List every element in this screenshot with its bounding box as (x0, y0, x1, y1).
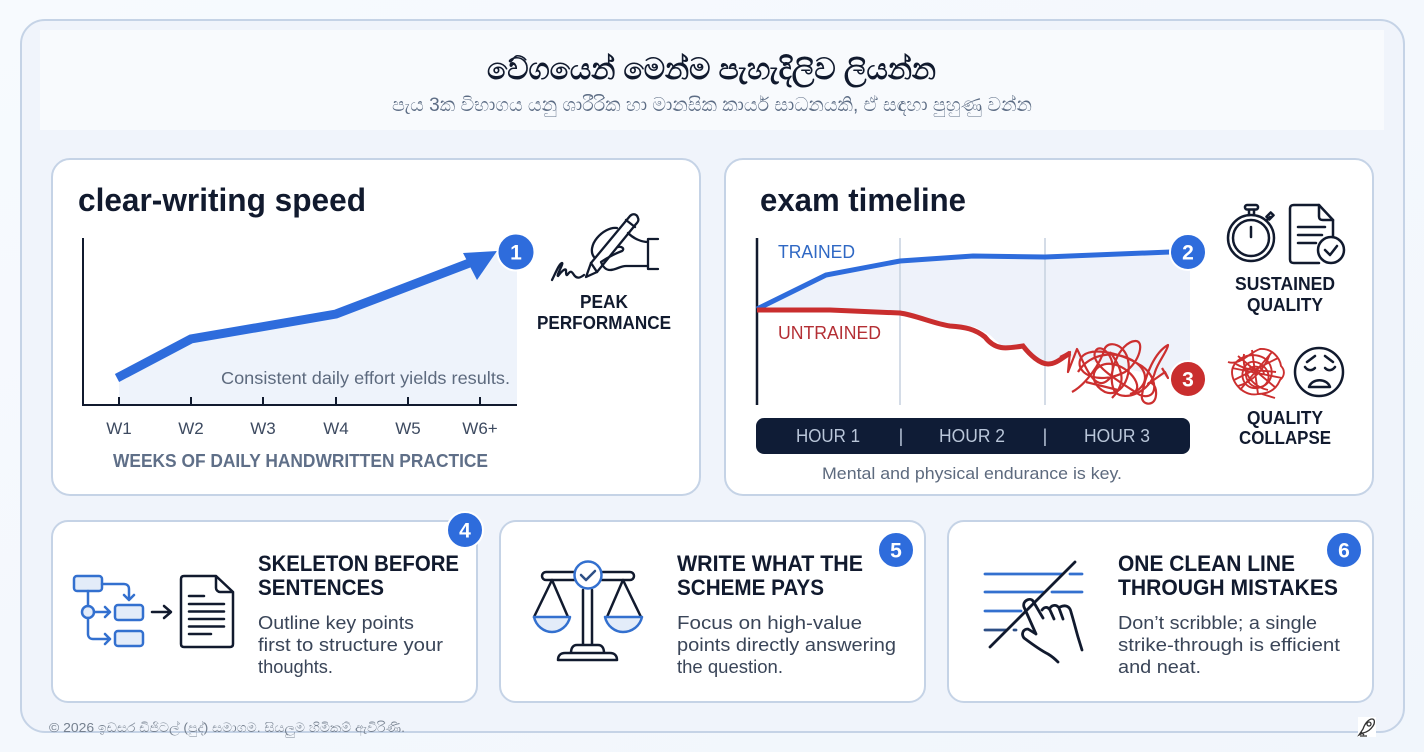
label: sustained quality (1235, 274, 1335, 315)
badge 3: 3 (1182, 368, 1194, 392)
card heading (1118, 551, 1338, 600)
card body: strike-through is efficient (1118, 634, 1340, 655)
heading: exam timeline: exam timeline (760, 182, 966, 218)
line chart: speed over weeks: W5 (395, 419, 421, 438)
label: peak performance: PEAK (580, 292, 628, 312)
line chart: speed over weeks: W1 (106, 419, 132, 438)
card body (258, 612, 443, 677)
label: quality collapse: QUALITY (1247, 408, 1323, 428)
header band (40, 30, 1384, 130)
badge 1 (498, 234, 534, 270)
footer copyright: © 2026 ඉඩසර ඩිජිටල් (පුද්) සමාගම. සියලුම හිමිකම් ඇවිරිණි. (49, 720, 405, 737)
badge 2 (1170, 234, 1206, 270)
panel: clear-writing speed (52, 159, 700, 495)
card 6: one clean line through mistakes (948, 521, 1373, 702)
card body: points directly answering (677, 634, 896, 655)
hour bar: | (1043, 426, 1047, 446)
label: peak performance: PERFORMANCE (537, 313, 671, 333)
badge 4: 4 (459, 520, 471, 542)
line chart: speed over weeks: W4 (323, 419, 349, 438)
card body: and neat. (1118, 656, 1201, 677)
icon: balance scale (534, 562, 642, 660)
badge 5 (878, 532, 914, 568)
icon: hand signing (552, 214, 658, 280)
series label: trained: TRAINED (778, 242, 855, 262)
card heading: THROUGH MISTAKES (1118, 575, 1338, 600)
icon: strike-through hand (985, 562, 1082, 662)
badge 3 (1170, 361, 1206, 397)
card body: Focus on high-value (677, 612, 862, 633)
card heading: SKELETON BEFORE (258, 551, 459, 576)
card heading: SCHEME PAYS (677, 575, 824, 600)
icon: outline to document (74, 576, 233, 647)
card heading: WRITE WHAT THE (677, 551, 863, 576)
line chart: speed over weeks: W3 (250, 419, 276, 438)
icon: pen nib watermark (1358, 717, 1376, 737)
subtitle: පැය 3ක විභාගය යනු ශාරීරික හා මානසික කාර්ය සාධනයකි, ඒ සඳහා පුහුණු වන්න (392, 94, 1032, 118)
label: quality collapse: COLLAPSE (1239, 428, 1331, 448)
card heading: SENTENCES (258, 575, 384, 600)
label: peak performance (537, 292, 671, 333)
card body (1118, 612, 1340, 677)
badge 2: 2 (1182, 242, 1194, 264)
hour bar: | (899, 426, 903, 446)
card heading (258, 551, 459, 600)
icon: stopwatch (1228, 205, 1274, 261)
icon: document with check (1290, 205, 1344, 263)
line chart: speed over weeks (83, 238, 517, 438)
label: quality collapse (1239, 408, 1331, 448)
card body: Don’t scribble; a single (1118, 612, 1317, 633)
series label: untrained: UNTRAINED (778, 323, 881, 343)
hour bar: HOUR 1 (796, 426, 860, 446)
red scribble (1060, 341, 1168, 404)
badge 1: 1 (510, 242, 522, 264)
card body: the question. (677, 656, 783, 677)
badge 6 (1326, 532, 1362, 568)
icon: sad face (1295, 348, 1343, 396)
badge 5: 5 (890, 540, 902, 562)
card heading (677, 551, 863, 600)
label: sustained quality: SUSTAINED (1235, 274, 1335, 294)
chart note: Mental and physical endurance is key. (822, 464, 1122, 483)
card heading: ONE CLEAN LINE (1118, 551, 1295, 576)
line chart: speed over weeks: W2 (178, 419, 204, 438)
card body: first to structure your (258, 634, 443, 655)
card body: Outline key points (258, 612, 414, 633)
card 5: write what the scheme pays (500, 521, 925, 702)
title: වේගයෙන් මෙන්ම පැහැදිලිව ලියන්න (487, 53, 936, 88)
line chart: speed over weeks: W6+ (462, 419, 498, 438)
card body: thoughts. (258, 656, 333, 677)
panel: exam timeline (725, 159, 1373, 495)
line chart: trained vs untrained (757, 238, 1190, 405)
hour bar: HOUR 3 (1084, 426, 1150, 446)
axis label: WEEKS OF DAILY HANDWRITTEN PRACTICE (113, 451, 488, 471)
hour bar (756, 418, 1190, 454)
hour bar: HOUR 2 (939, 426, 1005, 446)
label: sustained quality: QUALITY (1247, 295, 1323, 315)
card 4: skeleton before sentences (52, 512, 483, 702)
icon: red tangle (1228, 349, 1284, 398)
heading: clear-writing speed: clear-writing speed (78, 182, 366, 218)
badge 4 (447, 512, 483, 548)
chart note: Consistent daily effort yields results. (221, 368, 510, 388)
badge 6: 6 (1338, 540, 1350, 562)
card body (677, 612, 896, 677)
